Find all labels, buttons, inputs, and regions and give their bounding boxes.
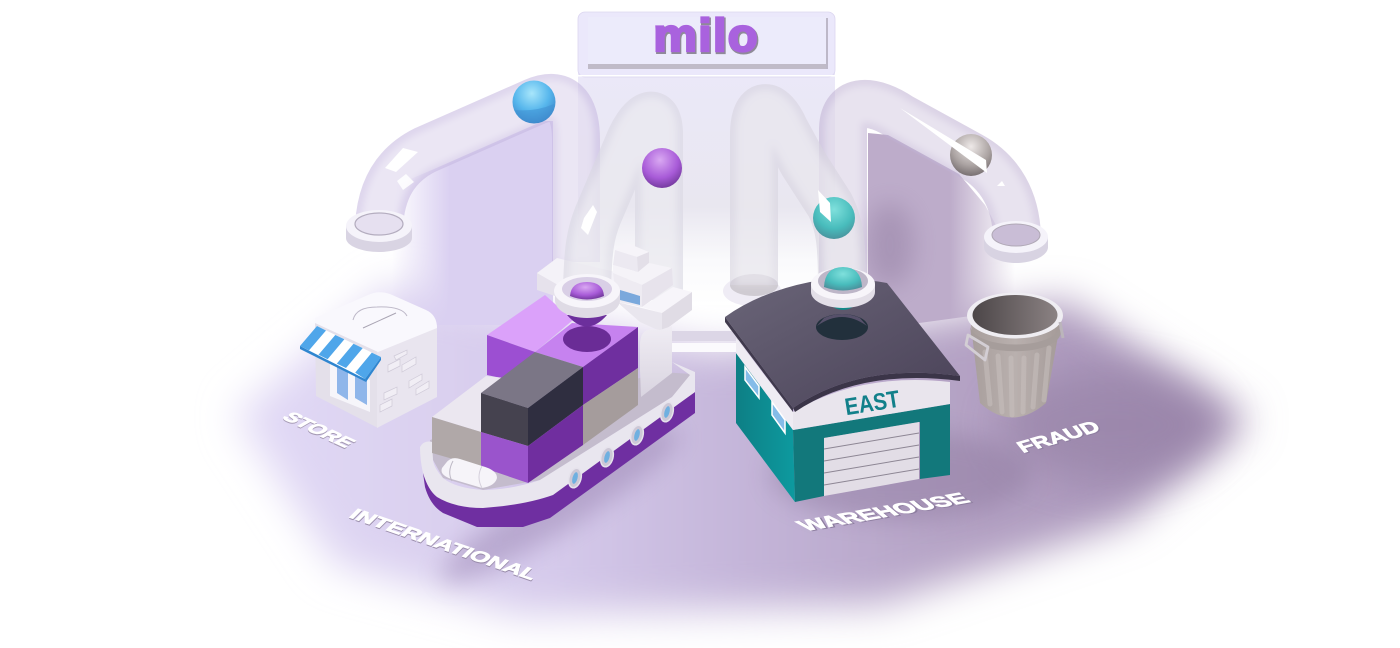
icon: warehouse: [725, 279, 960, 502]
icon: ship: [420, 258, 695, 527]
tier: [613, 263, 672, 285]
nozzle: teal: [811, 267, 875, 310]
container: purple rear: [487, 295, 573, 352]
label: store: STORE: [277, 410, 360, 451]
label: fraud: FRAUD: [1014, 418, 1106, 457]
container: grey lower right: [583, 368, 638, 445]
warehouse hatch: [816, 314, 868, 340]
warehouse gable: [793, 380, 950, 430]
icon: trash can: [966, 292, 1063, 418]
ship deck: [430, 372, 692, 490]
ship wing: [537, 258, 628, 302]
machine body: [578, 60, 835, 305]
container: purple top right: [535, 323, 638, 367]
icon: store: [300, 292, 437, 428]
ship bow rim: [420, 362, 695, 508]
can ribs: [985, 348, 1049, 415]
label: warehouse: WAREHOUSE: [793, 490, 977, 535]
warehouse side: [736, 353, 795, 502]
pipe: store: [346, 80, 576, 262]
ship portholes: [567, 401, 675, 489]
EAST sign: EAST: [843, 386, 902, 421]
label: warehouse: WAREHOUSE: [791, 490, 975, 534]
label: fraud: FRAUD: [1013, 417, 1105, 456]
label: fraud: [1013, 417, 1106, 457]
ball: teal: [813, 197, 855, 239]
label: store: [276, 409, 362, 451]
can handles: [966, 335, 988, 360]
pipe: fraud: [843, 104, 1048, 290]
small block: [615, 243, 649, 257]
ball: blue: [512, 80, 556, 124]
wordmark: milo: [654, 12, 760, 63]
label: international: [344, 506, 544, 584]
container: light left: [432, 376, 505, 432]
ball: grey: [950, 134, 992, 176]
pipe: international: [581, 116, 659, 300]
can rim: [967, 292, 1063, 338]
ship tower: [613, 243, 692, 397]
store roof: [315, 292, 437, 352]
ship barrel: [442, 458, 497, 488]
store awning: [300, 326, 381, 379]
store bricks: [380, 350, 429, 412]
machine rails: [672, 331, 738, 341]
ship hatch: [563, 326, 611, 352]
machine: milo sorter body: [578, 10, 835, 352]
wordmark: milo: [653, 10, 759, 62]
ball: purple: [642, 148, 682, 188]
label: international: INTERNATIONAL: [345, 507, 543, 584]
ship hull: [423, 392, 695, 527]
base ring: [723, 274, 781, 306]
ring: store outlet: [346, 210, 412, 252]
warehouse windows: [745, 367, 785, 433]
container: dark: [481, 352, 583, 408]
warehouse front: [793, 404, 950, 502]
label: store: STORE: [277, 409, 361, 450]
column: [640, 326, 672, 397]
ring: fraud outlet: [984, 221, 1048, 263]
floor shadow area: [235, 121, 1250, 615]
warehouse door: [824, 422, 919, 496]
container: purple lower: [481, 432, 528, 483]
pipe: warehouse: [754, 108, 875, 310]
warehouse roof: [725, 279, 960, 408]
store window: [330, 362, 370, 412]
can body: [971, 325, 1060, 418]
label: warehouse: [791, 489, 977, 535]
store walls: [315, 322, 378, 428]
nozzle: purple: [554, 274, 620, 326]
deck: [642, 287, 692, 313]
machine top panel: [578, 12, 835, 77]
label: international: INTERNATIONAL: [345, 506, 543, 583]
